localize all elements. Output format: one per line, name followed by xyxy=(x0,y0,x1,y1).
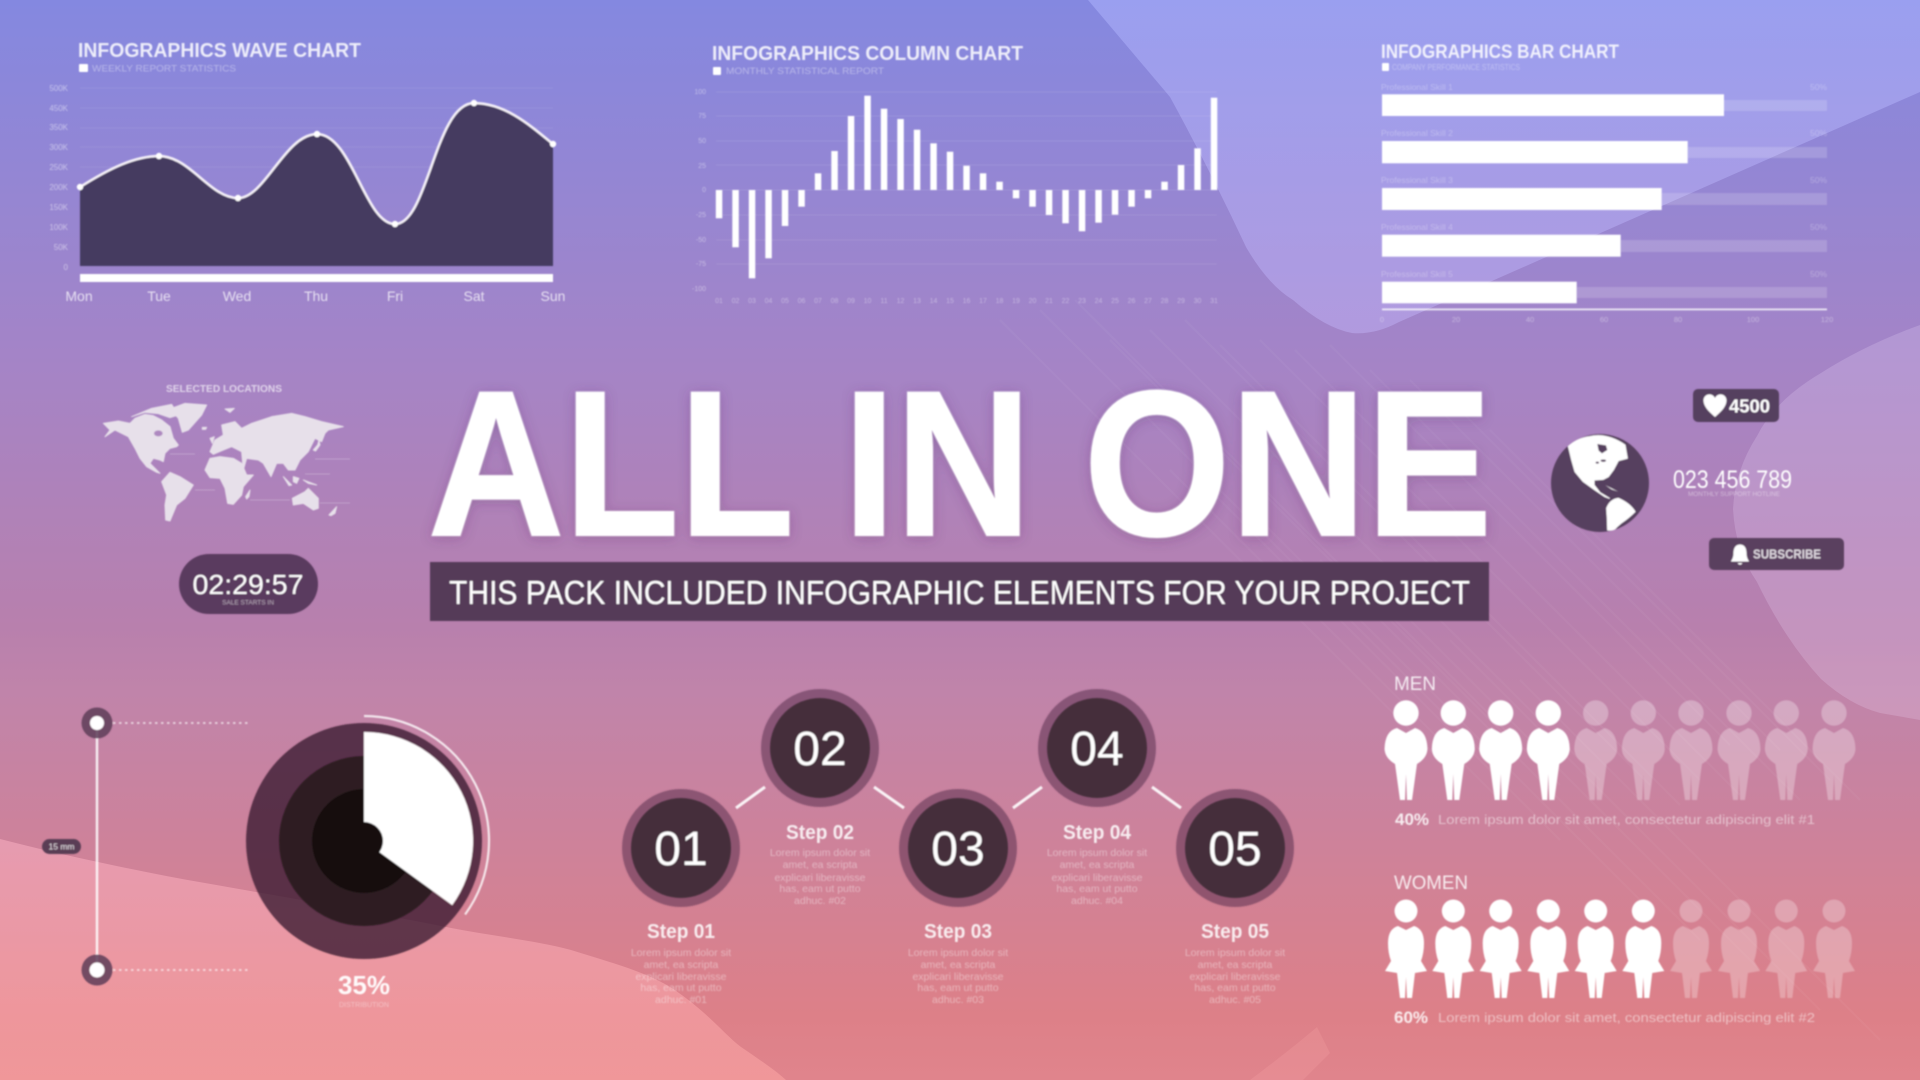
wave chart axis labels: 250K xyxy=(49,163,69,172)
column chart x axis: 30 xyxy=(1194,298,1201,305)
wave line and points xyxy=(77,100,556,227)
women caption: Lorem ipsum dolor sit amet, consectetur adipiscing elit #2 xyxy=(1438,1010,1815,1025)
step 05: Step 05 xyxy=(1201,921,1269,943)
column chart y axis: 25 xyxy=(698,163,706,170)
wave chart axis labels: 350K xyxy=(49,123,69,132)
step 02: Lorem ipsum dolor sit xyxy=(770,847,870,859)
step 01: 01 xyxy=(654,823,708,876)
subscribe label: SUBSCRIBE xyxy=(1753,548,1821,562)
step 01: Step 01 xyxy=(647,921,715,943)
column chart x axis: 09 xyxy=(847,298,855,305)
step 02: has, eam ut putto xyxy=(779,883,861,895)
step 02: adhuc. #02 xyxy=(794,895,846,907)
step connectors xyxy=(736,787,1181,808)
column chart x axis: 02 xyxy=(732,298,739,305)
step 04: Step 04 xyxy=(1063,822,1132,844)
column chart x axis: 27 xyxy=(1144,298,1152,305)
bar labels: Professional Skill 2 xyxy=(1381,128,1453,138)
weekday labels xyxy=(65,288,565,304)
column chart x axis: 17 xyxy=(979,298,987,305)
step 05: has, eam ut putto xyxy=(1194,982,1276,994)
main title: ALL IN ONE xyxy=(428,348,1492,579)
step 04: amet, ea scripta xyxy=(1060,859,1135,871)
column chart title: INFOGRAPHICS COLUMN CHART xyxy=(712,43,1023,65)
wave chart axis labels: 150K xyxy=(49,203,69,212)
column chart y axis: 100 xyxy=(694,89,706,96)
step 01: has, eam ut putto xyxy=(640,982,722,994)
weekday labels: Sun xyxy=(541,288,565,304)
step 04: explicari liberavisse xyxy=(1051,872,1143,884)
percentage caption: DISTRIBUTION xyxy=(339,1000,389,1009)
bar labels: Professional Skill 3 xyxy=(1381,175,1453,185)
map location labels xyxy=(170,454,350,503)
bar axis ticks: 0 xyxy=(1380,315,1384,324)
map heading: SELECTED LOCATIONS xyxy=(166,383,282,395)
step 01 xyxy=(622,789,740,1006)
column chart y axis: -100 xyxy=(692,286,706,293)
step 04: Lorem ipsum dolor sit xyxy=(1047,847,1147,859)
women heading: WOMEN xyxy=(1394,873,1468,894)
weekday labels: Thu xyxy=(304,288,328,304)
bar labels: 50% xyxy=(1810,175,1827,185)
bar axis ticks: 100 xyxy=(1747,315,1759,324)
wave chart axis labels: 450K xyxy=(49,104,69,113)
step 02: explicari liberavisse xyxy=(774,872,866,884)
panel: women pictogram xyxy=(1385,873,1855,1027)
subscribe button xyxy=(1709,538,1844,570)
women icons faded xyxy=(1670,900,1855,998)
icon: bell xyxy=(1731,544,1749,565)
bar axis ticks: 20 xyxy=(1452,315,1460,324)
column chart x axis: 31 xyxy=(1210,298,1218,305)
men heading: MEN xyxy=(1394,674,1436,695)
column chart x axis: 18 xyxy=(996,298,1003,305)
step 04: adhuc. #04 xyxy=(1071,895,1123,907)
step 05: 05 xyxy=(1208,823,1262,876)
column chart x axis: 25 xyxy=(1111,298,1119,305)
step 05: explicari liberavisse xyxy=(1189,971,1281,983)
bar axis ticks: 80 xyxy=(1674,315,1682,324)
column chart x axis: 20 xyxy=(1029,298,1036,305)
column chart x axis: 04 xyxy=(765,298,772,305)
white sector 35 percent xyxy=(364,732,473,905)
column chart x axis: 08 xyxy=(831,298,838,305)
step 04: has, eam ut putto xyxy=(1056,883,1138,895)
column chart y axis: -50 xyxy=(696,237,706,244)
women percentage: 60% xyxy=(1394,1008,1428,1027)
step 03 xyxy=(899,789,1017,1006)
wave chart axis labels: 500K xyxy=(49,84,69,93)
column chart x axis: 21 xyxy=(1045,298,1053,305)
bar axis ticks: 40 xyxy=(1526,315,1534,324)
column bars xyxy=(716,96,1217,278)
men caption: Lorem ipsum dolor sit amet, consectetur adipiscing elit #1 xyxy=(1438,812,1815,827)
step 03: explicari liberavisse xyxy=(912,971,1004,983)
wave chart axis labels: 100K xyxy=(49,223,69,232)
panel: men pictogram xyxy=(1384,674,1856,829)
column chart x axis: 03 xyxy=(748,298,756,305)
step 03: Step 03 xyxy=(924,921,992,943)
bar labels xyxy=(1381,82,1827,279)
column chart x axis: 12 xyxy=(897,298,904,305)
weekday labels: Tue xyxy=(147,288,171,304)
bar labels: Professional Skill 1 xyxy=(1381,82,1453,92)
column chart x axis: 15 xyxy=(946,298,954,305)
timer caption: SALE STARTS IN xyxy=(222,600,274,606)
panel: radial percentage chart xyxy=(246,716,489,1009)
timeline top node xyxy=(82,708,112,738)
weekday labels: Sat xyxy=(463,288,485,304)
timer pill xyxy=(179,554,318,614)
subtitle banner: THIS PACK INCLUDED INFOGRAPHIC ELEMENTS FOR YOUR PROJECT xyxy=(449,574,1470,611)
icon: globe xyxy=(1551,434,1649,532)
centre hub xyxy=(345,822,383,860)
column chart y axis: 50 xyxy=(698,138,706,145)
men percentage: 40% xyxy=(1395,810,1429,829)
panel: duration timeline xyxy=(42,708,248,986)
weekday labels: Mon xyxy=(65,288,93,304)
bars xyxy=(1382,94,1724,303)
step 04 xyxy=(1038,689,1156,907)
inner ring xyxy=(312,789,416,893)
step 04: 04 xyxy=(1070,723,1124,776)
bar labels: Professional Skill 5 xyxy=(1381,269,1453,279)
column chart y axis: 75 xyxy=(698,113,706,120)
column chart x axis: 10 xyxy=(864,298,871,305)
step 03: amet, ea scripta xyxy=(921,959,996,971)
column chart x axis: 28 xyxy=(1161,298,1168,305)
column chart x axis: 29 xyxy=(1177,298,1185,305)
subtitle banner xyxy=(430,562,1489,621)
panel: process steps xyxy=(622,689,1294,1006)
step 03: 03 xyxy=(931,823,985,876)
step 03: adhuc. #03 xyxy=(932,994,984,1006)
step 05 xyxy=(1176,789,1294,1006)
bar chart subtitle: COMPANY PERFORMANCE STATISTICS xyxy=(1392,62,1520,72)
bar axis ticks: 60 xyxy=(1600,315,1608,324)
bar labels: 50% xyxy=(1810,269,1827,279)
timeline bottom node xyxy=(82,954,112,986)
wave chart axis labels: 50K xyxy=(54,243,69,252)
column chart x axis: 13 xyxy=(913,298,921,305)
column chart x axis: 23 xyxy=(1078,298,1086,305)
step 01: explicari liberavisse xyxy=(635,971,727,983)
icon: heart xyxy=(1704,394,1726,417)
step 01: Lorem ipsum dolor sit xyxy=(631,947,731,959)
step 02: amet, ea scripta xyxy=(783,859,858,871)
wave chart axis labels: 200K xyxy=(49,183,69,192)
column chart y axis: -25 xyxy=(696,212,706,219)
bar labels: Professional Skill 4 xyxy=(1381,222,1453,232)
phone number: 023 456 789 xyxy=(1673,466,1792,494)
middle ring xyxy=(279,756,449,926)
duration pill xyxy=(42,839,81,854)
step 02 xyxy=(761,689,879,907)
phone caption: MONTHLY SUPPORT HOTLINE xyxy=(1688,491,1781,498)
bar labels: 50% xyxy=(1810,128,1827,138)
column chart x axis: 05 xyxy=(781,298,789,305)
step 03: has, eam ut putto xyxy=(917,982,999,994)
column chart x axis: 11 xyxy=(880,298,888,305)
likes count: 4500 xyxy=(1729,396,1770,416)
column chart x axis: 01 xyxy=(715,298,723,305)
bar axis ticks xyxy=(1380,315,1833,324)
column chart y axis xyxy=(692,89,706,293)
bar labels: 50% xyxy=(1810,82,1827,92)
weekday labels: Fri xyxy=(387,288,403,304)
column chart y axis: -75 xyxy=(696,261,706,268)
column chart y axis: 0 xyxy=(702,187,706,194)
men icons faded xyxy=(1574,700,1856,800)
bar axis xyxy=(1382,308,1827,310)
step 05: amet, ea scripta xyxy=(1198,959,1273,971)
duration pill: 15 mm xyxy=(49,842,74,852)
bar tracks xyxy=(1577,100,1827,298)
panel: wave chart xyxy=(49,40,565,304)
timeline stem xyxy=(96,723,98,970)
men icons filled xyxy=(1384,700,1570,800)
outer ring xyxy=(246,723,482,959)
step 05: adhuc. #05 xyxy=(1209,994,1261,1006)
percentage value: 35% xyxy=(338,970,390,1000)
likes badge xyxy=(1693,389,1779,422)
wave chart subtitle: WEEKLY REPORT STATISTICS xyxy=(92,64,236,74)
column chart x axis: 22 xyxy=(1062,298,1069,305)
step 01: amet, ea scripta xyxy=(644,959,719,971)
dotted leader lines xyxy=(113,723,248,970)
wave chart axis labels: 300K xyxy=(49,143,69,152)
column chart x axis: 19 xyxy=(1012,298,1020,305)
step 02: 02 xyxy=(793,723,847,776)
wave chart axis labels: 0 xyxy=(64,263,69,272)
column chart x axis: 07 xyxy=(814,298,822,305)
column chart x axis: 14 xyxy=(930,298,937,305)
wave base bar xyxy=(80,274,553,282)
step 05: Lorem ipsum dolor sit xyxy=(1185,947,1285,959)
column chart x axis xyxy=(715,298,1218,305)
panel: column chart xyxy=(692,43,1218,305)
wave chart title: INFOGRAPHICS WAVE CHART xyxy=(78,40,361,62)
panel: bar chart xyxy=(1380,42,1833,324)
women icons filled xyxy=(1385,900,1664,998)
column chart subtitle: MONTHLY STATISTICAL REPORT xyxy=(726,66,884,77)
bar axis ticks: 120 xyxy=(1821,315,1833,324)
wave chart axis labels xyxy=(49,84,69,272)
wave area xyxy=(80,103,553,266)
bar chart title: INFOGRAPHICS BAR CHART xyxy=(1381,42,1619,63)
step 02: Step 02 xyxy=(786,822,854,844)
panel: world map xyxy=(103,383,350,521)
weekday labels: Wed xyxy=(223,288,251,304)
step 01: adhuc. #01 xyxy=(655,994,707,1006)
step 03: Lorem ipsum dolor sit xyxy=(908,947,1008,959)
column chart x axis: 26 xyxy=(1128,298,1135,305)
bar labels: 50% xyxy=(1810,222,1827,232)
column chart x axis: 24 xyxy=(1095,298,1102,305)
column chart x axis: 16 xyxy=(963,298,970,305)
map continents xyxy=(103,403,343,521)
timer digits: 02:29:57 xyxy=(192,569,304,600)
progress arc xyxy=(364,716,489,914)
column chart x axis: 06 xyxy=(798,298,805,305)
